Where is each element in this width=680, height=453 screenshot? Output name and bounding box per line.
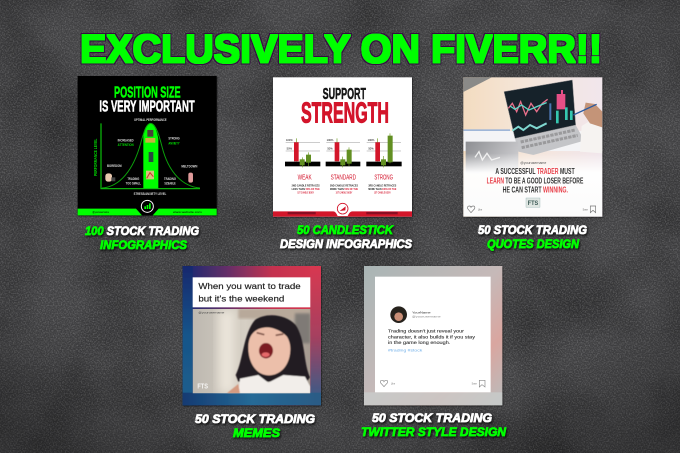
caption: 100 stock trading infographics xyxy=(85,224,199,252)
chart: bell curve: MELTDOWN xyxy=(181,163,197,168)
column labels: STRONG xyxy=(374,174,393,181)
candlestick chart: standard xyxy=(326,138,360,167)
quote text: A SUCCESSFUL TRADER MUST xyxy=(495,167,575,176)
tweet text: Trading doesn't just reveal your xyxy=(388,329,465,334)
footer bar and logo: @yourusername xyxy=(92,210,109,214)
like and save icons xyxy=(380,380,485,387)
column labels: STANDARD xyxy=(331,174,356,181)
meme caption box xyxy=(193,277,310,307)
crying child photo xyxy=(193,307,310,393)
caption: 50 candlestick design infographics: DESIGN INFOGRAPHICS xyxy=(280,237,413,251)
caption: 50 stock trading twitter style design: TWITTER STYLE DESIGN xyxy=(361,425,507,439)
caption: 100 stock trading infographics: 100 STOCK TRADING xyxy=(85,224,199,238)
heading: strength: STRENGTH xyxy=(301,97,389,129)
caption: 50 candlestick design infographics: 50 CANDLESTICK xyxy=(297,223,394,237)
caption: 50 stock trading quotes design: 50 STOCK TRADING xyxy=(478,223,587,237)
chart: bell curve: TOO SMALL xyxy=(126,182,142,186)
hand with pen xyxy=(573,103,602,153)
column descriptions: 1ST CANDLE BODY xyxy=(374,191,391,195)
chart: bell curve: STRONG xyxy=(168,137,180,141)
panel: trader quote xyxy=(463,77,602,217)
candlestick chart: standard: 50% xyxy=(327,147,333,151)
logo: FTS xyxy=(197,382,208,391)
caption: 50 stock trading memes: 50 STOCK TRADING xyxy=(195,412,315,426)
account name: YourName xyxy=(412,310,431,314)
quote text xyxy=(487,167,584,194)
candlestick chart: weak: 100% xyxy=(286,138,293,142)
chart: bell curve: BOREDOM xyxy=(107,163,122,168)
meme caption box: but it's the weekend xyxy=(198,293,285,303)
column descriptions: MORE THAN 50% OF THE xyxy=(330,187,358,191)
panel: position size infographic xyxy=(78,76,217,215)
like and save icons: Save xyxy=(583,209,589,211)
caption: 50 stock trading quotes design xyxy=(478,223,587,251)
footer bar and logo: www.website.com xyxy=(173,210,203,214)
like and save icons: Save xyxy=(472,383,478,385)
quote text: HE CAN START WINNING. xyxy=(503,185,568,194)
username: @yourusername xyxy=(520,161,546,165)
caption: 50 candlestick design infographics xyxy=(280,223,413,251)
chart: bell curve: TRADING xyxy=(164,177,176,181)
candlestick chart: strong: 100% xyxy=(368,138,375,142)
column labels xyxy=(298,174,393,181)
account name: @yourusername xyxy=(412,315,441,319)
tweet text xyxy=(388,329,476,345)
chart: bell curve xyxy=(93,118,200,196)
caption: 50 stock trading twitter style design xyxy=(361,411,507,439)
footer bar and logo xyxy=(273,203,412,217)
caption: 100 stock trading infographics: INFOGRAPHICS xyxy=(100,238,188,252)
heading: support: SUPPORT xyxy=(323,86,366,103)
avatar xyxy=(390,306,407,323)
candlestick chart: strong xyxy=(366,133,402,167)
panel: support strength infographic xyxy=(273,77,412,217)
caption: 50 stock trading quotes design: QUOTES DESIGN xyxy=(487,237,580,251)
laptop xyxy=(504,80,584,155)
caption: 50 stock trading twitter style design: 50 STOCK TRADING xyxy=(372,411,492,425)
heading: is very important: IS VERY IMPORTANT xyxy=(99,99,195,116)
caption: 50 stock trading memes: MEMES xyxy=(233,426,281,440)
candlestick chart: weak xyxy=(285,138,320,167)
column descriptions: LESS THAN 50% OF THE xyxy=(292,187,320,191)
chart: bell curve: INCREASED xyxy=(118,138,134,142)
chart: bell curve: SIZEABLE xyxy=(164,182,176,186)
candlestick chart: weak: 50% xyxy=(287,147,292,151)
column descriptions: MORE THAN 100% OF THE xyxy=(368,187,396,191)
meme caption box: When you want to trade xyxy=(198,281,301,291)
title: EXCLUSIVELY ON FIVERR!! xyxy=(80,28,602,72)
logo: FTS xyxy=(528,201,538,207)
heading: position size: POSITION SIZE xyxy=(114,84,181,101)
username: @yourusername xyxy=(198,310,225,314)
chart: bell curve: STRESS/ANXIETY LEVEL xyxy=(134,191,167,196)
chart: bell curve: ANXIETY xyxy=(168,141,180,145)
white tweet card xyxy=(375,277,491,392)
column descriptions xyxy=(292,183,396,195)
tablet xyxy=(466,142,518,173)
column labels: WEAK xyxy=(298,174,312,181)
hashtags: #trading #stock xyxy=(388,348,422,353)
chart: bell curve: ATTENTION xyxy=(118,143,134,147)
candlestick chart: standard: 100% xyxy=(327,138,334,142)
caption: 50 stock trading memes xyxy=(195,412,315,440)
tweet text: in the game long enough. xyxy=(388,340,450,345)
panel: meme xyxy=(183,266,321,405)
like and save icons xyxy=(468,206,596,213)
chart: bell curve: TRADING xyxy=(127,177,139,181)
chart: bell curve: OPTIMAL PERFORMANCE xyxy=(134,118,167,122)
column descriptions: 1ST CANDLE BODY xyxy=(297,191,314,195)
quote text: LEARN TO BE A GOOD LOSER BEFORE xyxy=(487,176,584,185)
column descriptions: 3RD CANDLE RETRACES xyxy=(368,183,396,187)
column descriptions: 1ST CANDLE BODY xyxy=(336,191,352,195)
chart: bell curve: PERFORMANCE LEVEL xyxy=(93,138,98,176)
figures on the curve xyxy=(105,130,193,183)
panel: twitter style post xyxy=(364,266,502,405)
like and save icons: Like xyxy=(478,209,483,211)
candlestick chart: strong: 50% xyxy=(368,147,374,151)
column descriptions: 2ND CANDLE RETRACES xyxy=(292,183,320,187)
footer bar and logo xyxy=(78,200,217,215)
like and save icons: Like xyxy=(391,383,396,385)
column descriptions: 2ND CANDLE RETRACES xyxy=(330,183,358,187)
tweet text: character, it also builds it if you stay xyxy=(388,335,476,340)
account name xyxy=(412,310,441,319)
